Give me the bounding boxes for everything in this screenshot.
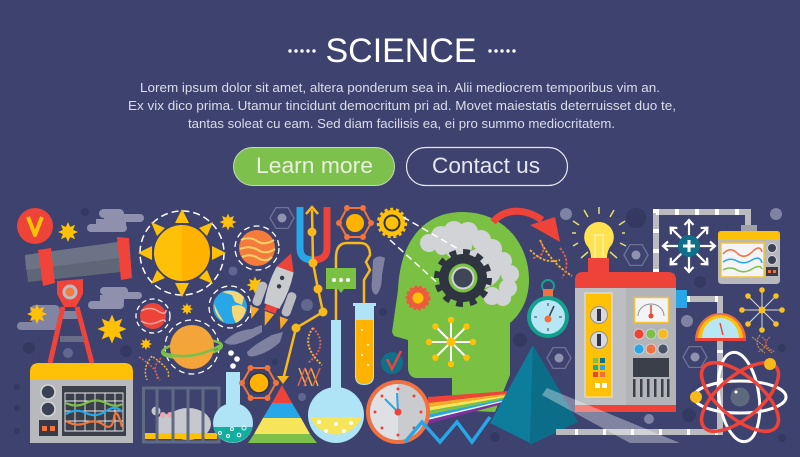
icon: zigzag wave: [405, 417, 490, 442]
title dots right: [488, 49, 516, 53]
button: contact us: [406, 148, 568, 186]
title dots left: [288, 49, 316, 53]
icon: colored pyramid: [248, 385, 317, 443]
icon: prism: [490, 345, 578, 445]
icon: half gauge: [695, 313, 746, 341]
icon: orange planet: [235, 226, 279, 270]
icon: dna right: [530, 240, 572, 278]
title: SCIENCE: SCIENCE: [326, 32, 476, 70]
icon: light bulb: [572, 207, 626, 258]
icon: orange gear: [407, 287, 429, 309]
icon: rainbow beam: [428, 390, 525, 424]
clouds middle: [88, 287, 142, 309]
icon: brain: [420, 221, 519, 306]
icon: radial molecule on head: [426, 317, 476, 367]
clouds upper: [87, 209, 144, 232]
icon: atom: [690, 350, 790, 444]
button: learn more: [234, 148, 394, 186]
icon: dna small: [752, 335, 775, 353]
icon: hex molecule: [239, 365, 279, 401]
dashed guide lines: [390, 217, 460, 287]
icon: dna left: [139, 356, 169, 380]
icon: yellow gear: [378, 210, 406, 236]
intro paragraph: [128, 81, 676, 131]
blue connector: [676, 290, 687, 308]
panel: monitor: [718, 231, 780, 284]
intro paragraph: Ex vix dico prima. Utamur tincidunt democritum pri ad. Movet maiestatis deterruisset duo te,: [128, 99, 676, 113]
background dots: [14, 208, 786, 442]
clouds left behind star: [17, 305, 80, 330]
icon: ringed planet: [161, 320, 223, 374]
icon: stopwatch: [527, 280, 569, 338]
hexagon decorations: [270, 208, 707, 368]
button: contact us: Contact us: [432, 153, 540, 178]
button: learn more: Learn more: [256, 153, 373, 178]
icon: big gear: [437, 252, 489, 304]
smoke clouds: [224, 256, 385, 356]
icon: red planet: [136, 299, 170, 333]
pipes: [556, 212, 757, 432]
icon: check badge: [381, 351, 403, 374]
icon: speech box and tube: [326, 243, 370, 322]
icon: round flask with teal liquid: [213, 350, 253, 443]
icon: red curved arrow: [493, 211, 560, 242]
stars: [27, 214, 264, 350]
icon: V badge: [17, 208, 53, 244]
arrow: yellow path with nodes: [277, 207, 328, 384]
icon: u-tube: [300, 207, 327, 260]
icon: rocket: [246, 247, 310, 333]
intro paragraph: Lorem ipsum dolor sit amet, altera ponderum sea in. Alii mediocrem temporibus vim an.: [140, 81, 660, 95]
light beam strip: [542, 388, 680, 443]
panel: control machine: [575, 258, 676, 412]
icon: hex molecule top: [336, 205, 374, 240]
intro paragraph: tantas soleat cu eam. Sed diam facilisis ea, ei pro summo mediocritatem.: [188, 117, 615, 131]
panel: oscilloscope machine: [30, 363, 133, 443]
icon: molecule right: [739, 287, 785, 333]
icon: arrows burst: [663, 220, 715, 272]
icon: sun: [138, 209, 226, 297]
icon: telescope: [25, 237, 132, 363]
icon: dna centre: [298, 328, 322, 386]
icon: test tube: [353, 303, 376, 385]
panel: mouse cage: [144, 388, 219, 442]
icon: wall clock: [366, 380, 430, 444]
icon: head silhouette: [392, 212, 529, 412]
icon: tall flask: [308, 320, 364, 443]
icon: earth: [209, 286, 251, 328]
